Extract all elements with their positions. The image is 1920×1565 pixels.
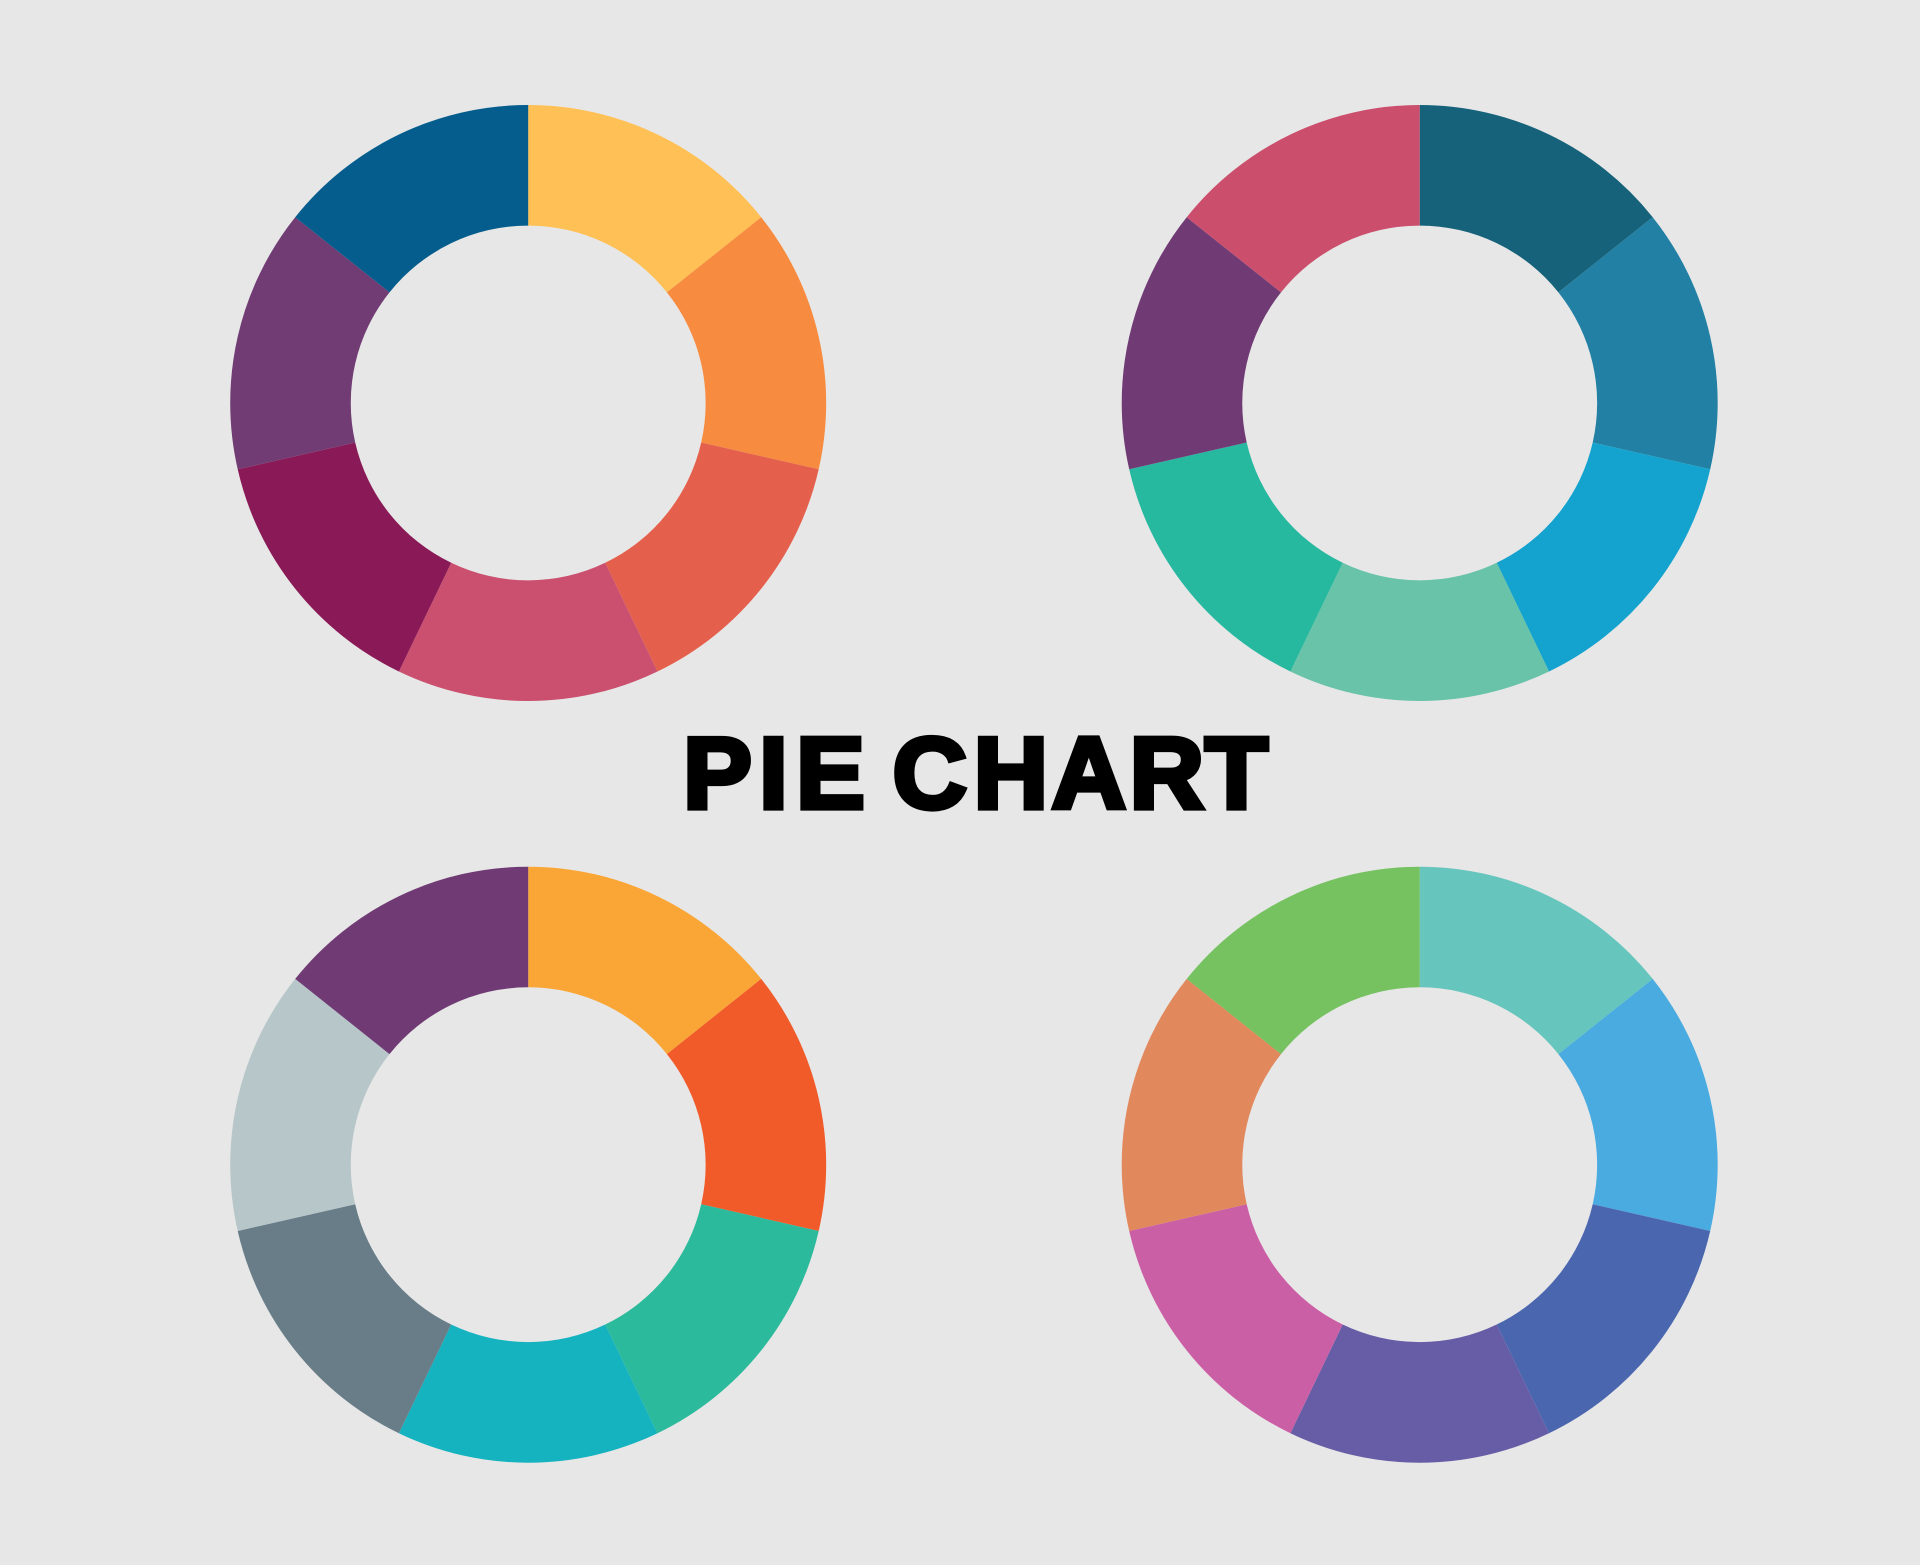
segment 7: leaf green [1187, 867, 1420, 1054]
segment 6: purple [230, 217, 390, 469]
segment 5: teal green [1129, 442, 1343, 672]
donut chart: pastel palette, bottom right [1122, 867, 1718, 1463]
segment 2: steel blue [1558, 217, 1718, 469]
segment 4: violet [1290, 1324, 1549, 1463]
donut chart: mixed palette, bottom left [230, 867, 826, 1463]
segment 6: pale grey blue [230, 979, 390, 1231]
segment 4: mint [1290, 563, 1549, 701]
title: PIE CHART [683, 717, 1268, 830]
segment 1: aqua [1420, 867, 1653, 1054]
segment 2: sky blue [1558, 979, 1718, 1231]
segment 2: red orange [667, 979, 826, 1231]
segment 6: salmon orange [1122, 979, 1281, 1231]
segment 1: amber [528, 867, 761, 1054]
donut chart: warm palette, top left [230, 105, 826, 701]
segment 1: yellow [528, 105, 761, 292]
segment 3: bright blue [1497, 442, 1710, 672]
donut chart: cool palette, top right [1122, 105, 1718, 701]
segment 5: crimson [238, 442, 451, 672]
segment 7: rose [1187, 105, 1420, 292]
segment 3: green teal [605, 1204, 819, 1433]
segment 1: dark teal [1420, 105, 1653, 292]
segment 6: purple [1122, 217, 1281, 469]
segment 7: navy blue [295, 105, 528, 292]
segment 3: indigo blue [1497, 1204, 1710, 1433]
segment 2: orange [667, 217, 826, 469]
segment 7: purple [295, 867, 528, 1054]
segment 4: cyan [399, 1324, 658, 1463]
segment 4: rose [399, 563, 658, 701]
segment 5: magenta pink [1129, 1204, 1343, 1433]
segment 3: coral [605, 442, 819, 672]
segment 5: slate [238, 1204, 451, 1433]
